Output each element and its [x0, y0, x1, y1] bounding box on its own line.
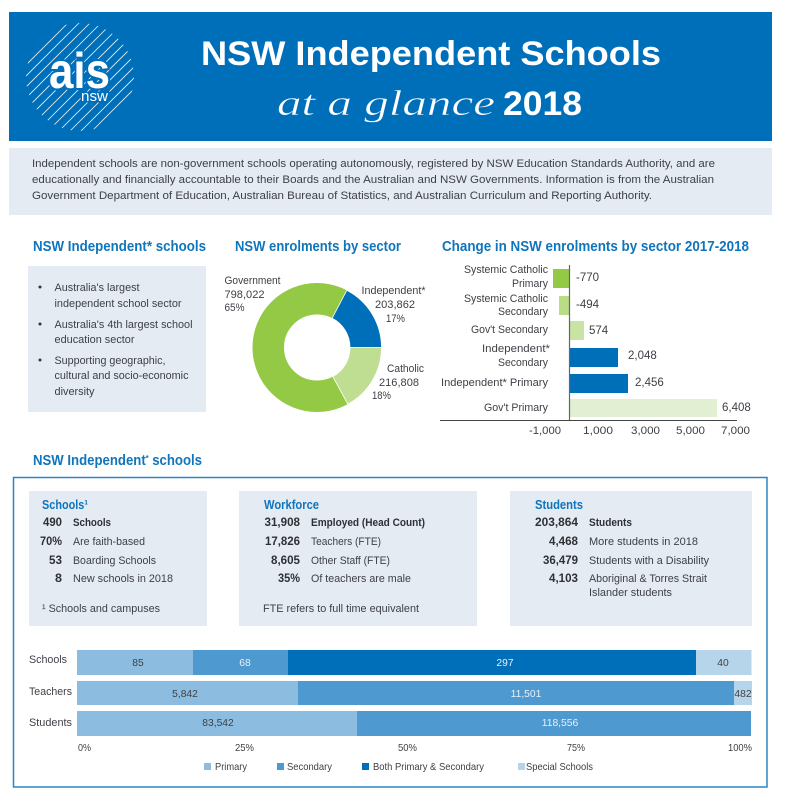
subtitle: at a glance [277, 83, 495, 123]
panel: workforce: 8,605 [271, 555, 301, 567]
panel: students: Students [589, 517, 632, 529]
bar chart: change in enrolments: Systemic Catholic [464, 293, 548, 305]
percent axis [78, 743, 752, 754]
row: schools: 297 [496, 658, 514, 669]
panel: students: 203,864 [535, 517, 579, 529]
row: schools: Schools [29, 654, 67, 666]
label: catholic: Catholic [387, 363, 424, 375]
bar chart: change in enrolments: Secondary [498, 357, 548, 369]
bar chart: change in enrolments: 3,000 [631, 425, 660, 437]
label: catholic: 18% [372, 390, 391, 402]
panel: students: More students in 2018 [589, 536, 698, 548]
outlined statistics frame [14, 478, 767, 787]
icon: AIS NSW logo: ais [49, 43, 110, 99]
icon: AIS NSW logo: nsw [81, 88, 108, 105]
legend: Special Schools [526, 762, 593, 773]
label: independent [362, 285, 426, 325]
heading: NSW Independent schools statistics: schools [149, 453, 202, 469]
panel: workforce: Other Staff (FTE) [311, 555, 390, 567]
heading: NSW Independent schools: NSW Independent* schools [33, 239, 206, 255]
panel: independent schools bullets: Australia's 4th largest school [54, 319, 192, 331]
subtitle: 2018 [503, 85, 582, 123]
label: government: 798,022 [224, 289, 264, 301]
bar chart: change in enrolments: Secondary [498, 306, 548, 318]
panel: workforce: 17,826 [265, 536, 300, 548]
panel: workforce: FTE refers to full time equivalent [263, 603, 419, 615]
panel: schools: 53 [49, 555, 62, 567]
intro text panel: Government Department of Education, Australian Bureau of Statistics, and Australian Curriculum and Reporting Authority. [32, 190, 652, 202]
panel: students: 36,479 [543, 555, 578, 567]
panel: independent schools bullets: education sector [54, 334, 135, 346]
bar chart: change in enrolments: 1,000 [583, 425, 613, 437]
header banner [0, 10, 772, 141]
row: teachers: 482 [734, 689, 752, 700]
bar chart: change in enrolments: 5,000 [676, 425, 705, 437]
bar chart: change in enrolments: 574 [589, 325, 609, 337]
panel: independent schools bullets: cultural and socio-economic [54, 370, 189, 382]
bar chart: change in enrolments: Systemic Catholic [464, 264, 548, 276]
panel: students [510, 491, 752, 626]
legend: Both Primary & Secondary [373, 762, 485, 773]
heading: NSW Independent schools statistics: NSW Independent [33, 453, 157, 469]
row: schools [29, 650, 752, 675]
row: teachers: 5,842 [172, 689, 198, 700]
bar chart: change in enrolments [440, 264, 751, 437]
label: government [224, 275, 280, 314]
panel: schools: Schools [73, 517, 111, 529]
bar chart: change in enrolments: -770 [576, 272, 599, 284]
slice: independent [332, 290, 382, 348]
bar chart: change in enrolments: Gov't Primary [484, 402, 548, 414]
panel: students: 4,103 [549, 573, 578, 585]
panel: students: Aboriginal & Torres Strait [589, 573, 707, 585]
intro text panel: Independent schools are non-government schools operating autonomously, registered by NSW Education Standards Authority, and are [32, 158, 715, 170]
panel: students: Islander students [589, 587, 672, 599]
panel: workforce: Teachers (FTE) [311, 536, 381, 548]
donut chart: enrolments by sector [224, 275, 426, 404]
panel: independent schools bullets: Supporting geographic, [54, 355, 166, 367]
label: catholic: 216,808 [379, 377, 419, 389]
label: catholic [372, 363, 424, 402]
panel: schools: 70% [40, 536, 62, 548]
subtitle [277, 83, 582, 123]
panel: schools: 490 [43, 517, 62, 529]
bar chart: change in enrolments: Independent* [482, 343, 551, 355]
intro text panel [9, 148, 772, 215]
stacked bar chart: schools, teachers, students [29, 650, 752, 773]
panel: workforce: 31,908 [264, 517, 301, 529]
row: students: 83,542 [202, 718, 234, 729]
legend: Secondary [287, 762, 333, 773]
panel: schools: Schools¹ [42, 498, 88, 512]
heading: enrolments by sector: NSW enrolments by sector [235, 239, 401, 255]
label: independent: Independent* [362, 285, 426, 297]
panel: workforce [239, 491, 477, 626]
row: students [29, 711, 751, 736]
percent axis: 100% [728, 743, 752, 754]
panel: schools: Boarding Schools [73, 555, 156, 567]
panel: independent schools bullets: diversity [54, 386, 95, 398]
icon: AIS NSW logo [26, 23, 134, 131]
title: NSW Independent Schools [201, 35, 661, 73]
intro text panel: educationally and financially accountable to their Boards and the Australian and NSW Governments. Information is from the Australian [32, 174, 714, 186]
bar chart: change in enrolments: -494 [576, 299, 600, 311]
label: independent: 17% [386, 313, 405, 325]
panel: students: Students with a Disability [589, 555, 709, 567]
panel: independent schools bullets: Australia's largest [54, 282, 140, 294]
legend [204, 762, 593, 773]
label: government: 65% [224, 302, 245, 314]
bar chart: change in enrolments: 2,456 [635, 377, 664, 389]
slice: catholic [333, 348, 382, 404]
panel: schools: New schools in 2018 [73, 573, 173, 585]
row: schools: 40 [717, 658, 729, 669]
row: teachers [29, 681, 752, 705]
row: teachers: Teachers [29, 686, 72, 698]
row: schools: 85 [132, 658, 144, 669]
panel: independent schools bullets: independent school sector [54, 298, 182, 310]
bar chart: change in enrolments: 6,408 [722, 402, 751, 414]
bar chart: change in enrolments: Gov't Secondary [471, 324, 548, 336]
panel: schools: Are faith-based [73, 536, 145, 548]
row: schools: 68 [239, 658, 251, 669]
percent axis: 0% [78, 743, 91, 754]
panel: workforce: 35% [278, 573, 300, 585]
row: teachers: 11,501 [511, 689, 542, 700]
bar chart: change in enrolments: Primary [512, 278, 548, 290]
panel: workforce: Employed (Head Count) [311, 517, 425, 529]
panel: schools: ¹ Schools and campuses [42, 603, 160, 615]
row: students: Students [29, 717, 72, 729]
legend: Primary [215, 762, 248, 773]
panel: workforce: Workforce [264, 498, 319, 512]
percent axis: 50% [398, 743, 417, 754]
row: students: 118,556 [542, 718, 578, 729]
bar chart: change in enrolments: Independent* Primary [441, 377, 548, 389]
panel: students: 4,468 [549, 536, 579, 548]
panel: workforce: Of teachers are male [311, 573, 411, 585]
panel: schools: 8 [55, 573, 63, 585]
panel: schools [29, 491, 207, 626]
heading: NSW Independent schools statistics: * [146, 454, 149, 463]
panel: independent schools bullets [28, 266, 206, 412]
percent axis: 75% [567, 743, 585, 754]
bar chart: change in enrolments: -1,000 [529, 425, 561, 437]
panel: students: Students [535, 498, 583, 512]
heading: change in enrolments: Change in NSW enrolments by sector 2017-2018 [442, 239, 749, 255]
bar chart: change in enrolments: 2,048 [628, 350, 657, 362]
label: independent: 203,862 [375, 299, 415, 311]
percent axis: 25% [235, 743, 254, 754]
label: government: Government [224, 275, 280, 287]
bar chart: change in enrolments: 7,000 [721, 425, 750, 437]
